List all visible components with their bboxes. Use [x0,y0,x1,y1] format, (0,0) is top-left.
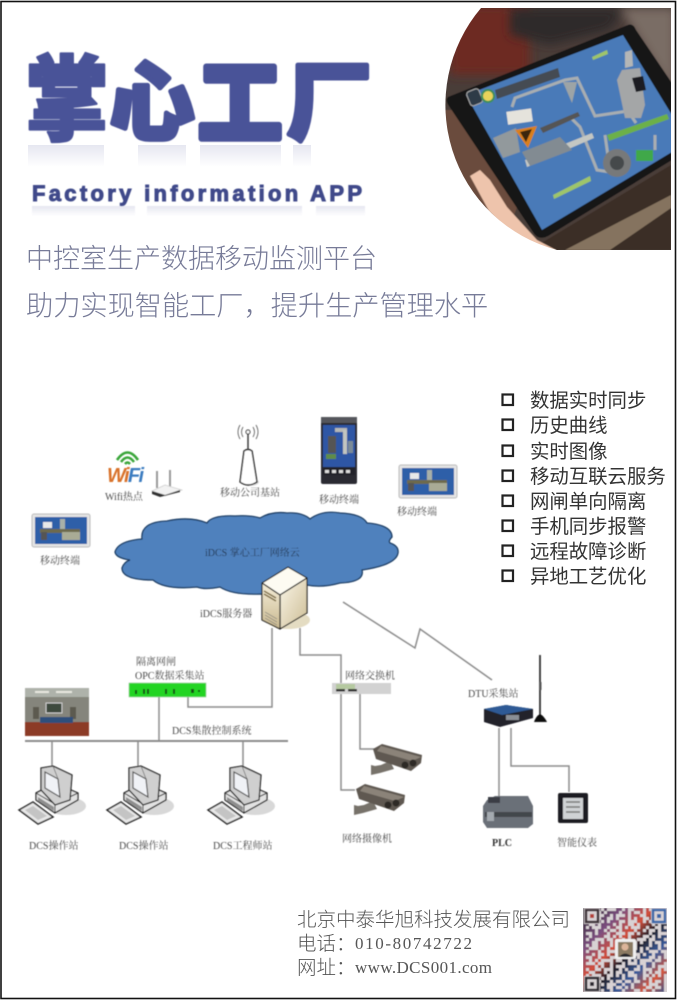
icon: camera 2 [354,784,405,815]
icon: green OPC device [129,683,206,697]
label: isolation gateway and OPC station: 隔离网闸 [136,655,176,668]
label: network switch: 网络交换机 [345,669,395,682]
connection lines [25,602,569,797]
feature checklist: 远程故障诊断 [530,541,646,563]
label: mobile terminal (left): 移动终端 [40,554,80,567]
icon: smartphone [321,417,357,484]
label: DTU station: DTU采集站 [468,687,519,700]
feature checklist: 网闸单向隔离 [530,491,646,513]
icon: wifi logo: WiFi [107,465,144,487]
feature checklist: 数据实时同步 [530,390,646,412]
feature checklist: 历史曲线 [530,415,608,437]
feature checklist [502,390,666,588]
photo: tablet held in hand [440,5,677,255]
label: DCS engineer station: DCS工程师站 [213,839,272,852]
icon: DCS engineer station [208,766,275,824]
icon: wifi router [152,470,182,497]
icon: DTU antenna [534,655,547,722]
QR code [583,908,667,992]
label: DCS system: DCS集散控制系统 [172,724,251,737]
label: isolation gateway and OPC station: OPC数据采集站 [135,669,204,682]
label: DCS operator station 2: DCS操作站 [119,839,168,852]
icon: iDCS server [262,567,310,629]
feature checklist: 移动互联云服务 [530,466,666,488]
icon: mobile base station [238,425,259,486]
icon: smart meter [558,793,588,823]
feature checklist: 手机同步报警 [530,516,646,538]
label: smart meter: 智能仪表 [557,836,597,849]
title: 掌心工厂: 厂 [287,57,371,151]
company contact block: 网址： [297,957,356,979]
title: 掌心工厂 [25,49,371,155]
label: mobile terminal (right): 移动终端 [397,505,437,518]
tagline line 1: 中控室生产数据移动监测平台 [26,244,377,274]
company contact block: 电话： [297,933,356,955]
title: 掌心工厂: 工 [198,54,282,155]
label: wifi hotspot: Wifi热点 [105,490,144,503]
feature checklist: 实时图像 [530,441,608,463]
label: mobile terminal (phone): 移动终端 [319,493,359,506]
icon: camera 1 [371,744,422,775]
label: network camera: 网络摄像机 [342,832,392,845]
subtitle: Factory information APP: Factory information APP [32,181,362,206]
company contact block: 北京中泰华旭科技发展有限公司 [297,909,570,931]
company contact block [297,909,570,979]
title: 掌心工厂: 掌 [25,49,109,153]
icon: DTU device [484,705,533,727]
icon: network switch [332,683,391,694]
label: iDCS server: iDCS服务器 [200,607,252,620]
feature checklist: 异地工艺优化 [530,566,646,588]
label: base station: 移动公司基站 [220,486,280,499]
icon: DCS operator station 1 [19,766,86,824]
company contact block: 010-80742722 [355,934,472,953]
icon: tablet left [32,514,90,547]
network cloud: iDCS 掌心工厂网络云 [205,546,300,559]
title reflection [28,145,311,167]
tagline line 2: 助力实现智能工厂，提升生产管理水平 [26,290,488,321]
company contact block: www.DCS001.com [355,958,492,977]
icon: DCS operator station 2 [107,766,174,824]
icon: PLC [483,796,533,828]
label: PLC: PLC [492,838,512,849]
icon: tablet right [399,465,457,498]
title: 掌心工厂: 心 [110,57,194,151]
image: control room [25,688,89,736]
label: isolation gateway and OPC station [135,655,204,682]
network cloud [115,512,398,594]
network diagram [19,417,597,852]
icon: wifi logo [107,452,144,487]
label: DCS operator station 1: DCS操作站 [29,839,78,852]
